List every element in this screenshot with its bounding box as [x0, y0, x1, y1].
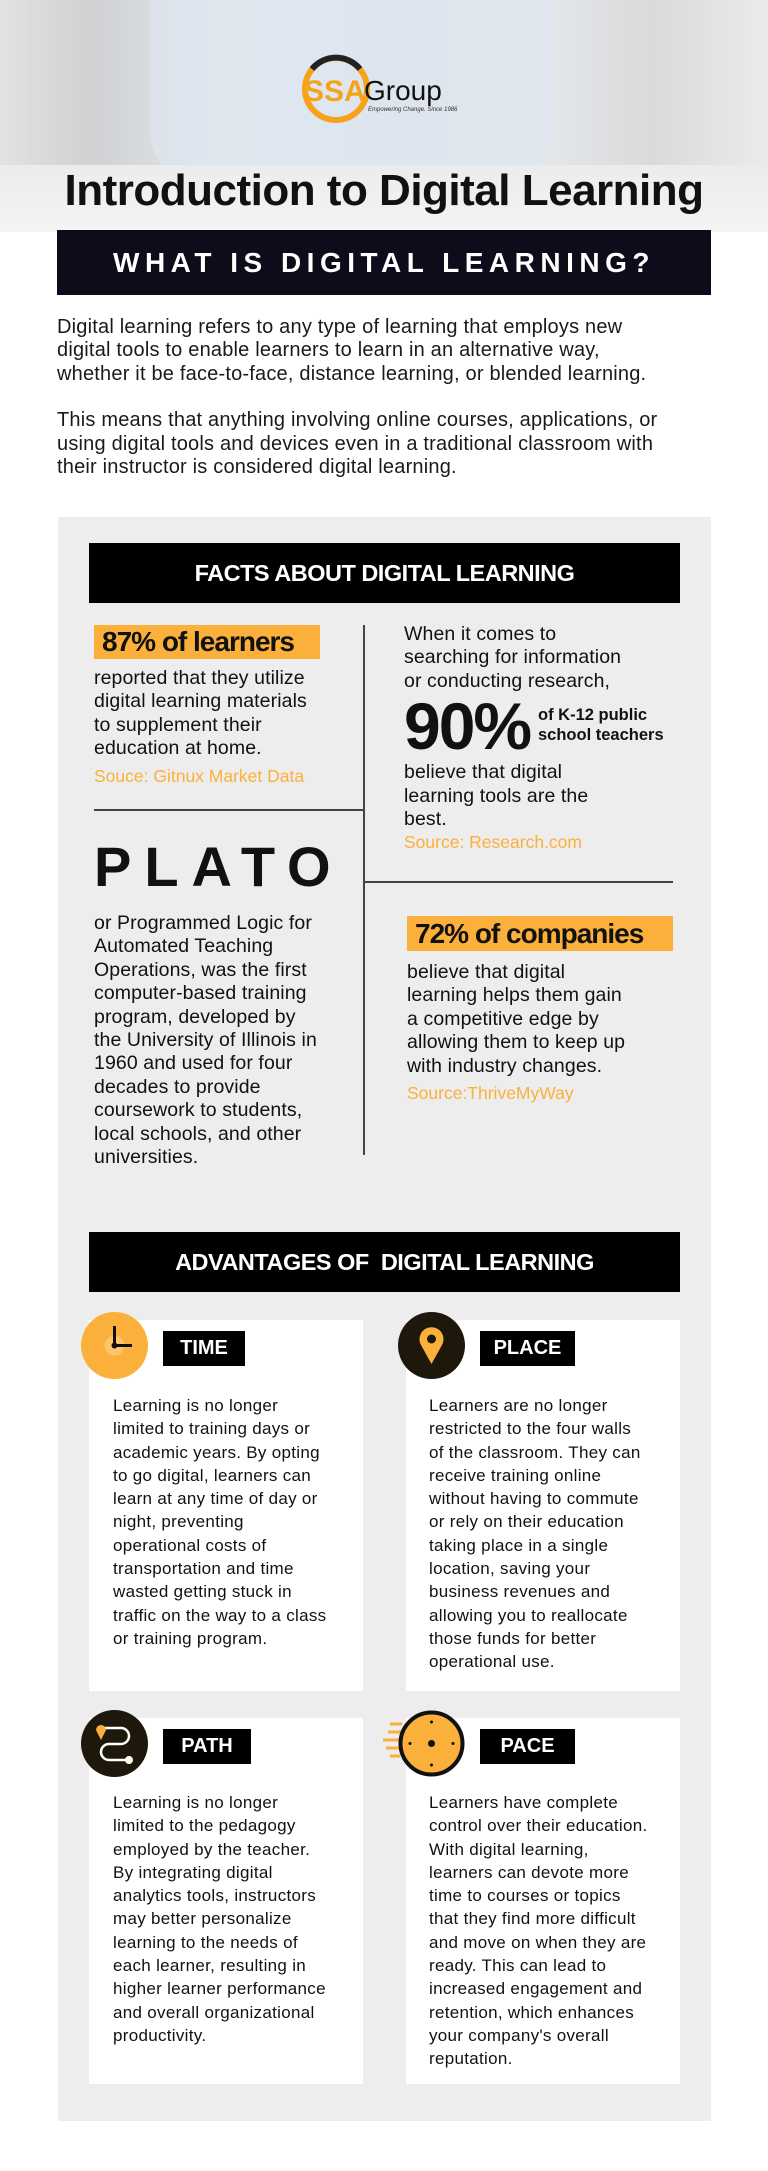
card: time: operational costs of	[113, 1536, 266, 1555]
card: pace: and move on when they are	[429, 1933, 646, 1952]
card: time: wasted getting stuck in	[113, 1582, 292, 1601]
fact: 90%: 90%	[404, 689, 530, 763]
card: path: learning to the needs of	[113, 1933, 298, 1952]
fact: 87%: reported that they utilize	[94, 667, 305, 689]
card: place: those funds for better	[429, 1629, 596, 1648]
card: place: without having to commute	[429, 1489, 639, 1508]
card: place: business revenues and	[429, 1582, 610, 1601]
fact: 87%: Souce: Gitnux Market Data	[94, 766, 304, 786]
fact: 90%: Source: Research.com	[404, 832, 582, 852]
card: time: night, preventing	[113, 1512, 244, 1531]
fact: 87%: to supplement their	[94, 714, 262, 736]
fact: 87%: education at home.	[94, 737, 262, 759]
card: pace: control over their education.	[429, 1816, 648, 1835]
fact: 72%: a competitive edge by	[407, 1008, 599, 1030]
intro text: Digital learning refers to any type of learning that employs new	[57, 316, 622, 338]
fact: 90%: learning tools are the	[404, 785, 588, 807]
logo: Empowering Change. Since 1986	[368, 107, 458, 113]
fact: PLATO: program, developed by	[94, 1006, 296, 1028]
fact: 72%	[407, 916, 673, 1103]
fact: PLATO	[94, 835, 344, 1168]
fact: 72%: allowing them to keep up	[407, 1031, 625, 1053]
logo	[302, 54, 458, 123]
fact: 72%: Source:ThriveMyWay	[407, 1083, 574, 1103]
fact: 87%: digital learning materials	[94, 690, 307, 712]
card: place: of the classroom. They can	[429, 1443, 641, 1462]
heading: advantages: ADVANTAGES OF DIGITAL LEARNING	[175, 1249, 594, 1275]
fact: 72%: learning helps them gain	[407, 984, 622, 1006]
card: time	[89, 1320, 363, 1691]
card: path: productivity.	[113, 2026, 206, 2045]
card: pace: reputation.	[429, 2049, 513, 2068]
fact: 72%: with industry changes.	[407, 1055, 602, 1077]
fact: PLATO: 1960 and used for four	[94, 1052, 292, 1074]
icon: speed clock	[383, 1710, 464, 1776]
card: path: employed by the teacher.	[113, 1840, 310, 1859]
panel: gray background: local schools, and other	[94, 1123, 301, 1145]
card: pace: Learners have complete	[429, 1793, 618, 1812]
fact: 90%	[404, 623, 664, 852]
card: time: learn at any time of day or	[113, 1489, 318, 1508]
card: pace: that they find more difficult	[429, 1909, 636, 1928]
card: time: academic years. By opting	[113, 1443, 320, 1462]
intro text: digital tools to enable learners to learn in an alternative way,	[57, 339, 600, 361]
icon: clock	[81, 1312, 148, 1379]
card: pace: ready. This can lead to	[429, 1956, 606, 1975]
fact: 90%: best.	[404, 808, 447, 830]
label: pace	[480, 1729, 575, 1764]
card: path: higher learner performance	[113, 1979, 326, 1998]
fact: 90%: believe that digital	[404, 761, 562, 783]
fact: PLATO: coursework to students,	[94, 1099, 302, 1121]
logo: Group	[364, 75, 442, 106]
fact: 72%: 72% of companies	[415, 918, 643, 949]
card: pace: your company's overall	[429, 2026, 609, 2045]
card: pace: retention, which enhances	[429, 2003, 634, 2022]
card: time: transportation and time	[113, 1559, 294, 1578]
fact: PLATO: Operations, was the first	[94, 959, 307, 981]
card: path: each learner, resulting in	[113, 1956, 306, 1975]
label: path	[163, 1729, 251, 1764]
fact: 87%	[94, 625, 320, 786]
card: pace: With digital learning,	[429, 1840, 589, 1859]
card: path: Learning is no longer	[113, 1793, 278, 1812]
card: time: to go digital, learners can	[113, 1466, 311, 1485]
header photo background	[0, 0, 768, 232]
card: place: allowing you to reallocate	[429, 1606, 628, 1625]
label: time	[163, 1331, 245, 1366]
fact: PLATO: decades to provide	[94, 1076, 261, 1098]
label: time: TIME	[180, 1337, 228, 1359]
intro text	[57, 316, 657, 478]
heading: advantages	[89, 1232, 680, 1292]
heading: facts	[89, 543, 680, 603]
label: path: PATH	[181, 1735, 233, 1757]
icon: path	[81, 1710, 148, 1777]
card: time: limited to training days or	[113, 1419, 310, 1438]
heading: facts: FACTS ABOUT DIGITAL LEARNING	[195, 560, 574, 586]
fact: PLATO: PLATO	[94, 835, 344, 898]
title: Introduction to Digital Learning	[64, 166, 704, 215]
card: path: analytics tools, instructors	[113, 1886, 316, 1905]
card: place	[406, 1320, 680, 1691]
logo: SSA	[304, 75, 366, 108]
label: place	[480, 1331, 575, 1366]
card: time: or training program.	[113, 1629, 267, 1648]
card: path: By integrating digital	[113, 1863, 273, 1882]
card: place: taking place in a single	[429, 1536, 608, 1555]
fact: 90%: When it comes to	[404, 623, 556, 645]
label: place: PLACE	[494, 1337, 561, 1359]
intro text: This means that anything involving online courses, applications, or	[57, 409, 657, 431]
card: pace: increased engagement and	[429, 1979, 642, 1998]
card: time: Learning is no longer	[113, 1396, 278, 1415]
card: place: operational use.	[429, 1652, 555, 1671]
label: pace: PACE	[500, 1735, 555, 1757]
icon: location pin	[398, 1312, 465, 1379]
card: pace: time to courses or topics	[429, 1886, 621, 1905]
card: pace	[406, 1718, 680, 2084]
card: path: may better personalize	[113, 1909, 292, 1928]
heading: what is digital learning	[57, 230, 711, 295]
fact: PLATO: Automated Teaching	[94, 935, 273, 957]
fact: PLATO: the University of Illinois in	[94, 1029, 317, 1051]
intro text: whether it be face-to-face, distance learning, or blended learning.	[57, 363, 646, 385]
card: path: limited to the pedagogy	[113, 1816, 296, 1835]
intro text: their instructor is considered digital learning.	[57, 456, 457, 478]
fact: 90%: school teachers	[538, 726, 664, 744]
card: time: traffic on the way to a class	[113, 1606, 326, 1625]
heading: what is digital learning: WHAT IS DIGITAL LEARNING?	[113, 247, 655, 278]
card: place: receive training online	[429, 1466, 601, 1485]
fact: 90%: or conducting research,	[404, 670, 610, 692]
card: pace: learners can devote more	[429, 1863, 629, 1882]
fact: PLATO: computer-based training	[94, 982, 307, 1004]
card: place: restricted to the four walls	[429, 1419, 631, 1438]
fact: PLATO: or Programmed Logic for	[94, 912, 312, 934]
fact: 72%: believe that digital	[407, 961, 565, 983]
fact: 87%: 87% of learners	[102, 626, 294, 657]
intro text: using digital tools and devices even in a traditional classroom with	[57, 433, 653, 455]
card: place: location, saving your	[429, 1559, 590, 1578]
panel: gray background: universities.	[94, 1146, 198, 1168]
fact: 90%: of K-12 public	[538, 706, 647, 724]
panel: gray background	[58, 517, 711, 2121]
card: path: and overall organizational	[113, 2003, 315, 2022]
card: place: Learners are no longer	[429, 1396, 608, 1415]
fact: 90%: searching for information	[404, 646, 621, 668]
card: path	[89, 1718, 363, 2084]
card: place: or rely on their education	[429, 1512, 624, 1531]
